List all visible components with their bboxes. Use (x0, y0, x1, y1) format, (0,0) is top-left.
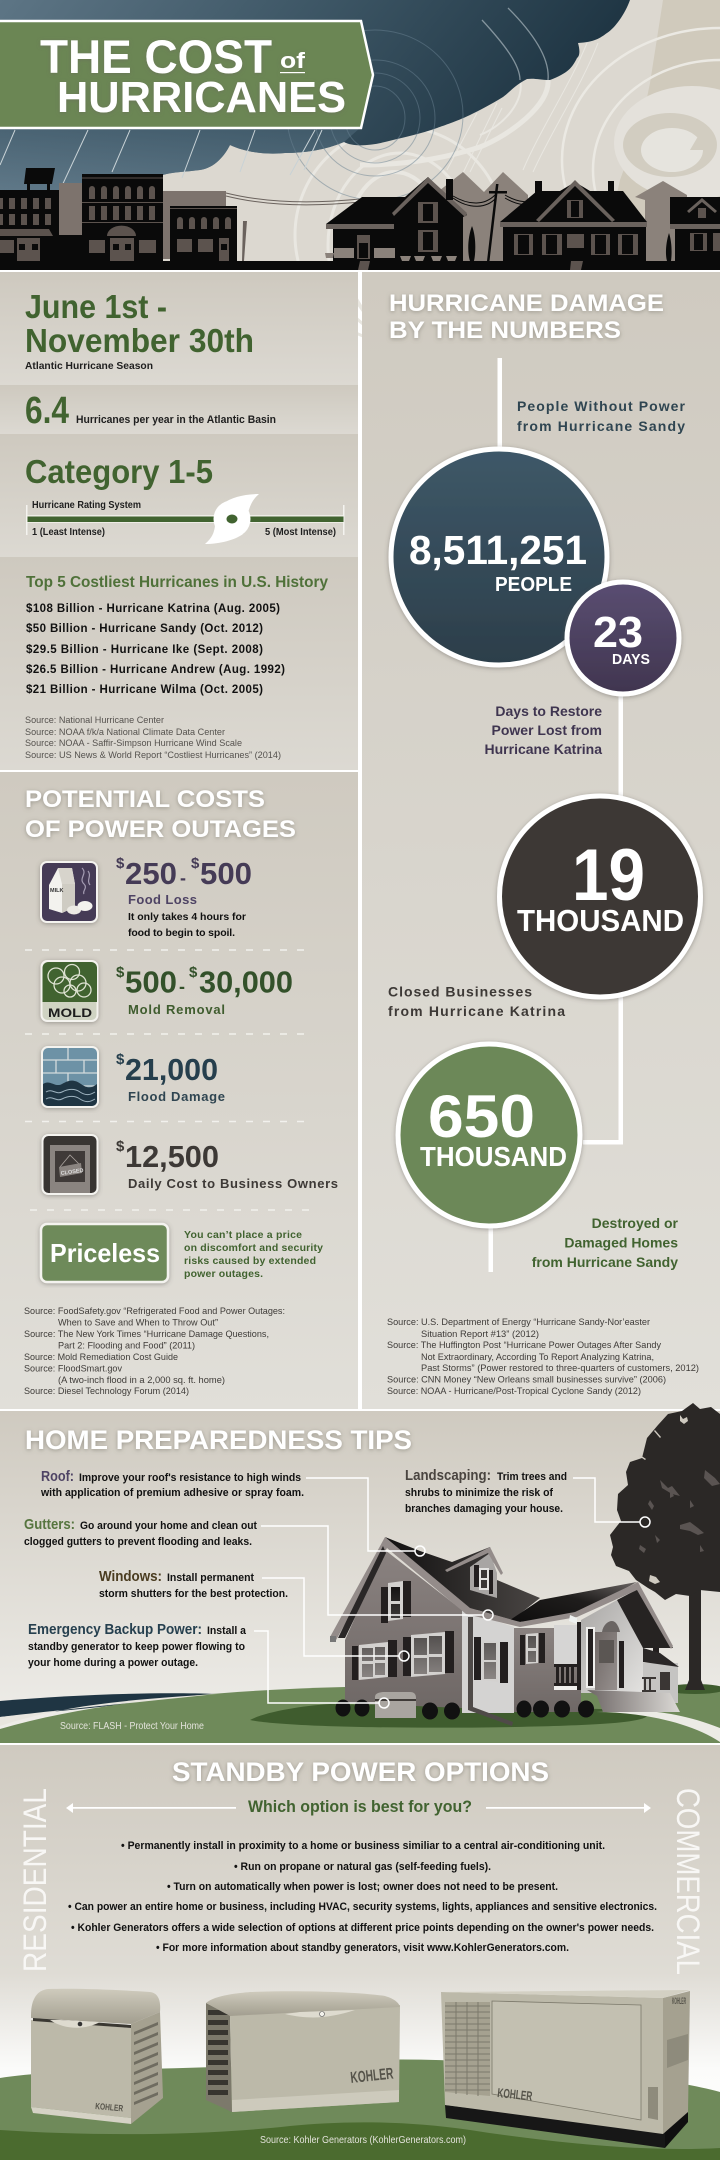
source: Source: FLASH - Protect Your Home (60, 1720, 204, 1732)
source: Source: Kohler Generators (KohlerGenerators.com) (260, 2134, 466, 2146)
generator: commercial: KOHLER (497, 2085, 533, 2104)
main gable wall (345, 1550, 462, 1708)
bullet list: • Run on propane or natural gas (self-feeding fuels). (234, 1861, 491, 1873)
Flood damage stat (116, 1051, 225, 1104)
tip: emergency backup power: your home during a power outage. (28, 1657, 198, 1669)
label: people without power: from Hurricane Sandy (517, 418, 685, 434)
tip: windows: Windows: (99, 1568, 162, 1585)
heading: BY THE NUMBERS (389, 317, 621, 344)
sources: Source: FloodSmart.gov (24, 1364, 122, 1374)
shrubs (336, 1700, 594, 1720)
hill and lawn (0, 1684, 720, 1743)
generator: small residential (31, 1989, 163, 2124)
sources: Source: NOAA - Hurricane/Post-Tropical Cyclone Sandy (2012) (387, 1386, 641, 1397)
skyline: houses (0, 172, 720, 270)
stat circle: 650 thousand: THOUSAND (420, 1141, 567, 1172)
priceless badge (41, 1224, 168, 1282)
roof trim (330, 1537, 673, 1649)
steps (587, 1690, 680, 1712)
tip: roof: Improve your roof's resistance to high winds (79, 1472, 301, 1484)
hills (0, 2059, 720, 2160)
sources: Past Storms” (Power restored to three-quarters of customers, 2012) (421, 1363, 699, 1374)
Food loss stat: 500 (200, 856, 252, 891)
Business cost stat: 12,500 (125, 1139, 219, 1174)
label: destroyed homes: Damaged Homes (564, 1234, 678, 1250)
sources: Source: NOAA - Saffir-Simpson Hurricane Wind Scale (25, 738, 242, 749)
shutters (352, 1581, 545, 1683)
bullet list: • Can power an entire home or business, including HVAC, security systems, lights, appliances and sensitive electronics. (68, 1901, 657, 1913)
cross roof (510, 1582, 637, 1622)
Food loss stat: $ (191, 855, 200, 872)
tip: roof: with application of premium adhesive or spray foam. (40, 1487, 304, 1499)
title: HURRICANES (57, 73, 346, 122)
light side wall (462, 1610, 514, 1713)
icon: milk carton (41, 862, 97, 922)
bullet list: • For more information about standby generators, visit www.KohlerGenerators.com. (156, 1942, 569, 1954)
bullet list: • Kohler Generators offers a wide selection of options at different price points depending on the owner's power needs. (71, 1922, 654, 1934)
panel: top 5 costliest hurricanes: Top 5 Costliest Hurricanes in U.S. History (26, 574, 328, 591)
label: destroyed homes: from Hurricane Sandy (532, 1254, 678, 1270)
stat circle: 19 thousand (500, 796, 700, 997)
subheading: Which option is best for you? (248, 1797, 472, 1816)
tip: gutters: Gutters: (24, 1516, 75, 1533)
panel: category scale: 5 (Most Intense) (265, 527, 336, 538)
main roof (385, 1537, 540, 1620)
label: days to restore power (485, 703, 602, 757)
stat circle: 650 thousand: 650 (428, 1083, 535, 1150)
bullet list: • Turn on automatically when power is lost; owner does not need to be present. (167, 1881, 558, 1893)
list of hurricane costs: $108 Billion - Hurricane Katrina (Aug. 2005) (26, 603, 280, 615)
heading: STANDBY POWER OPTIONS (172, 1757, 549, 1787)
Food loss stat: It only takes 4 hours for (128, 911, 246, 923)
Food loss stat: food to begin to spoil. (128, 927, 235, 939)
tip: gutters: Go around your home and clean out (80, 1520, 257, 1532)
sources: (A two-inch flood in a 2,000 sq. ft. home) (58, 1375, 225, 1386)
list of hurricane costs: $50 Billion - Hurricane Sandy (Oct. 2012) (26, 623, 263, 635)
list of hurricane costs: $21 Billion - Hurricane Wilma (Oct. 2005) (26, 684, 263, 696)
heading (389, 290, 664, 344)
season date heading: June 1st - (25, 288, 167, 325)
sources: Source: US News & World Report “Costliest Hurricanes” (2014) (25, 750, 281, 761)
panel: standby power options (0, 1745, 720, 2160)
generator: medium residential (206, 1991, 400, 2112)
generator: small residential: KOHLER (95, 2101, 124, 2113)
icon: mold (42, 961, 98, 1021)
label: people without power (517, 398, 686, 434)
Mold removal stat: 30,000 (199, 964, 293, 1000)
tip: landscaping: shrubs to minimize the risk of (405, 1487, 553, 1499)
icon: flooded wall (42, 1047, 98, 1107)
heading: HOME PREPAREDNESS TIPS (25, 1425, 412, 1455)
Mold removal stat: $ (189, 964, 198, 981)
tip: emergency backup power: standby generator to keep power flowing to (28, 1641, 245, 1653)
panel: hurricane season: Atlantic Hurricane Season (25, 360, 153, 372)
Mold removal stat: - (179, 976, 185, 996)
tip: landscaping (405, 1467, 567, 1515)
vertical label: commercial: COMMERCIAL (670, 1788, 706, 1975)
sources: Source: NOAA f/k/a National Climate Data Center (25, 727, 225, 738)
heading (25, 786, 296, 843)
label: closed businesses: from Hurricane Katrina (388, 1003, 565, 1019)
Flood damage stat: 21,000 (125, 1052, 218, 1087)
label: people without power: People Without Power (517, 398, 686, 414)
tree (610, 1403, 720, 1690)
Flood damage stat: Flood Damage (128, 1089, 225, 1104)
list of hurricane costs (26, 603, 285, 696)
panel: hurricanes per year: 6.4 (25, 390, 69, 432)
panel: category scale: Category 1-5 (25, 453, 213, 490)
icon: milk carton: MILK (50, 888, 63, 894)
Food loss stat: 250 (125, 856, 177, 891)
sources: Source: Diesel Technology Forum (2014) (24, 1386, 189, 1397)
tip: windows: storm shutters for the best protection. (99, 1588, 288, 1600)
sources: Situation Report #13” (2012) (421, 1329, 539, 1340)
panel: potential costs of power outages (0, 772, 358, 1409)
label: days to restore power: Power Lost from (492, 722, 602, 738)
tip: windows (99, 1568, 288, 1600)
sources (387, 1317, 699, 1397)
label: destroyed homes (532, 1215, 679, 1270)
generator (375, 1692, 416, 1718)
Mold removal stat (116, 964, 293, 1017)
priceless text: You can’t place a price (184, 1229, 302, 1241)
sources: Source: The Huffington Post “Hurricane Power Outages After Sandy (387, 1340, 661, 1351)
stat circle: 8,511,251 people (391, 449, 607, 665)
label: closed businesses (388, 984, 565, 1019)
sources: Source: The New York Times “Hurricane Damage Questions, (24, 1329, 269, 1340)
double arrow (66, 1803, 651, 1813)
panel: top 5 costliest hurricanes (0, 557, 358, 770)
icon: closed business (42, 1135, 98, 1194)
Food loss stat: Food Loss (128, 892, 197, 907)
Food loss stat: - (180, 868, 186, 888)
icon: closed business: CLOSED (60, 1168, 84, 1177)
panel: category scale: 1 (Least Intense) (32, 527, 105, 538)
sources: Not Extraordinary, According To Report Analyzing Katrina, (421, 1352, 654, 1363)
label: days to restore power: Hurricane Katrina (485, 741, 602, 757)
Flood damage stat: $ (116, 1051, 125, 1068)
tip: landscaping: Trim trees and (497, 1471, 567, 1483)
stat circle: 8,511,251 people: PEOPLE (495, 574, 572, 596)
season date heading: November 30th (25, 322, 254, 359)
rear wing (643, 1663, 678, 1703)
sources: When to Save and When to Throw Out” (58, 1318, 218, 1328)
panel: hurricane season (0, 272, 358, 385)
label: destroyed homes: Destroyed or (592, 1215, 679, 1231)
season date heading (25, 288, 254, 359)
sources: Source: National Hurricane Center (25, 715, 164, 726)
Food loss stat (116, 855, 252, 939)
panel: home preparedness tips (0, 1403, 720, 1743)
bullet list (68, 1840, 657, 1954)
stat circle: 23 days (567, 582, 679, 694)
title (40, 30, 346, 122)
stat circle: 8,511,251 people: 8,511,251 (409, 527, 587, 573)
panel: category scale (0, 434, 358, 557)
porch rail (554, 1664, 577, 1686)
panel: dark storm cloud (0, 0, 630, 200)
Business cost stat (116, 1138, 338, 1191)
panel: hurricanes per year: Hurricanes per year in the Atlantic Basin (76, 414, 276, 426)
tip: emergency backup power (28, 1621, 247, 1669)
Mold removal stat: 500 (125, 964, 177, 1000)
priceless text: risks caused by extended (184, 1255, 316, 1267)
stat circle: 23 days: DAYS (612, 652, 650, 668)
tip: emergency backup power: Emergency Backup Power: (28, 1621, 202, 1638)
priceless text: on discomfort and security (184, 1242, 323, 1254)
icon: mold: MOLD (48, 1008, 92, 1020)
list of hurricane costs: $26.5 Billion - Hurricane Andrew (Aug. 1992) (26, 664, 285, 676)
priceless text (184, 1229, 323, 1280)
window panes (362, 1587, 536, 1679)
label: days to restore power: Days to Restore (495, 703, 602, 719)
Mold removal stat: $ (116, 964, 125, 981)
sources: Source: FoodSafety.gov “Refrigerated Food and Power Outages: (24, 1306, 285, 1317)
bullet list: • Permanently install in proximity to a home or business similiar to a central air-conditioning unit. (121, 1840, 605, 1852)
sources: Part 2: Flooding and Food” (2011) (58, 1340, 195, 1352)
heading: POTENTIAL COSTS (25, 786, 265, 813)
Food loss stat: $ (116, 855, 125, 872)
tip: roof (40, 1468, 304, 1499)
heading: HURRICANE DAMAGE (389, 290, 664, 317)
panel: standby power options: KOHLER (672, 1996, 686, 2006)
tip: landscaping: Landscaping: (405, 1467, 491, 1484)
sources (24, 1306, 285, 1397)
stat circle: 19 thousand: 19 (572, 835, 645, 916)
tip: emergency backup power: Install a (207, 1625, 247, 1637)
stat circle: 650 thousand (398, 1044, 580, 1226)
tip: roof: Roof: (41, 1468, 74, 1485)
tip: landscaping: branches damaging your house. (405, 1503, 563, 1515)
middle wall (514, 1628, 581, 1712)
panel: hurricane damage by the numbers (362, 272, 720, 1409)
Business cost stat: $ (116, 1138, 125, 1155)
heading: OF POWER OUTAGES (25, 816, 296, 843)
Mold removal stat: Mold Removal (128, 1002, 225, 1017)
sources: Source: Mold Remediation Cost Guide (24, 1352, 178, 1363)
skyline: city buildings (0, 168, 360, 261)
Business cost stat: Daily Cost to Business Owners (128, 1176, 338, 1191)
callout connectors (254, 1478, 650, 1708)
title: of (280, 48, 306, 73)
icon: hurricane symbol (205, 494, 259, 544)
tip: windows: Install permanent (167, 1572, 254, 1584)
downspout (468, 1617, 513, 1726)
sources: Source: U.S. Department of Energy “Hurricane Sandy-Nor’easter (387, 1317, 650, 1328)
right gable wall (581, 1600, 646, 1693)
title: THE COST (40, 30, 272, 83)
panel: header storm scene (0, 0, 720, 343)
window frames (359, 1581, 538, 1682)
tip: gutters (24, 1516, 257, 1548)
house illustration (330, 1537, 680, 1726)
generator: commercial (441, 1990, 690, 2148)
tip: gutters: clogged gutters to prevent flooding and leaks. (24, 1536, 252, 1548)
label: closed businesses: Closed Businesses (388, 984, 532, 1000)
generator: medium residential: KOHLER (350, 2066, 394, 2087)
panel: hurricanes per year (0, 385, 358, 434)
priceless text: power outages. (184, 1268, 263, 1280)
vertical label: residential: RESIDENTIAL (17, 1788, 53, 1972)
sources (25, 715, 281, 761)
panel: title sign (0, 21, 373, 128)
sources: Source: CNN Money “New Orleans small businesses survive” (2006) (387, 1374, 666, 1386)
panel: category scale: Hurricane Rating System (32, 500, 141, 511)
stat circle: 23 days: 23 (593, 608, 643, 657)
priceless badge: Priceless (50, 1238, 160, 1268)
stat circle: 19 thousand: THOUSAND (517, 903, 684, 938)
list of hurricane costs: $29.5 Billion - Hurricane Ike (Sept. 2008) (26, 644, 263, 656)
porch overhang (617, 1588, 673, 1648)
dormer (470, 1553, 497, 1598)
